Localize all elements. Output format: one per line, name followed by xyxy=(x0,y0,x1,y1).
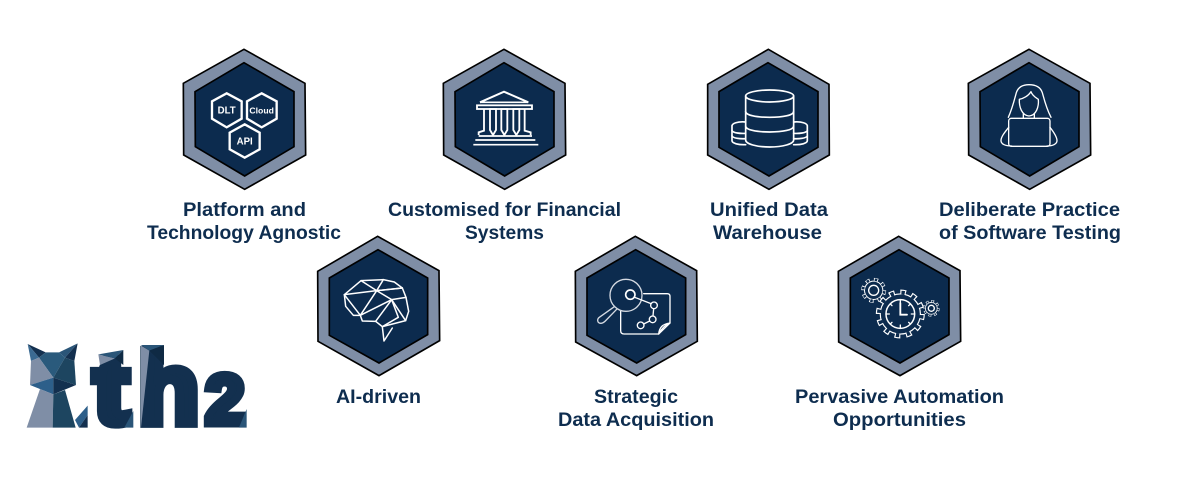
label: Unified Data Warehouse: Unified Data xyxy=(710,200,828,221)
label: Customised for Financial Systems: Customised for Financial xyxy=(388,200,621,221)
small gear top left xyxy=(863,279,885,301)
hexagon badge with DLT, Cloud and API icon xyxy=(183,49,306,189)
panel: AI-driven xyxy=(318,236,440,408)
logo: th2 with geometric cat xyxy=(27,333,247,445)
logo wordmark xyxy=(94,333,247,445)
logo wordmark: t xyxy=(94,335,129,444)
label: Deliberate Practice of Software Testing: Deliberate Practice xyxy=(939,200,1120,221)
label: Unified Data Warehouse: Warehouse xyxy=(713,223,822,244)
hexagon badge with database icon xyxy=(708,49,829,189)
label: Platform and Technology Agnostic: Platform and xyxy=(183,200,306,221)
label: Platform and Technology Agnostic: Technology Agnostic xyxy=(147,223,341,244)
hexagon badge with magnifier and data document icon xyxy=(575,236,697,376)
panel: Platform and Technology Agnostic xyxy=(147,49,341,244)
logo cat xyxy=(27,343,88,428)
panel: Deliberate Practice of Software Testing xyxy=(939,49,1121,244)
hexagon badge with DLT, Cloud and API icon: DLT xyxy=(218,105,236,116)
label: AI-driven: AI-driven xyxy=(336,387,421,408)
logo wordmark: 2 xyxy=(205,361,244,439)
label: Deliberate Practice of Software Testing: of Software Testing xyxy=(939,223,1121,244)
large gear with clock xyxy=(878,292,923,336)
logo wordmark: h xyxy=(138,333,199,445)
hexagon badge with polygonal brain icon xyxy=(318,236,440,376)
label: Strategic Data Acquisition: Strategic xyxy=(594,387,678,408)
panel: Customised for Financial Systems xyxy=(388,49,621,244)
label: Pervasive Automation Opportunities: Pervasive Automation xyxy=(795,387,1004,408)
panel: Unified Data Warehouse xyxy=(708,49,829,244)
panel: Pervasive Automation Opportunities xyxy=(795,236,1004,431)
hexagon badge with gears and clock icon xyxy=(838,236,961,376)
label: Customised for Financial Systems: Systems xyxy=(465,223,544,244)
hexagon badge with person at laptop icon xyxy=(968,49,1091,189)
label: Strategic Data Acquisition: Data Acquisition xyxy=(558,410,714,431)
panel: Strategic Data Acquisition xyxy=(558,236,714,431)
label: Pervasive Automation Opportunities: Opportunities xyxy=(833,410,966,431)
hexagon badge with DLT, Cloud and API icon: API xyxy=(237,136,253,147)
small gear right xyxy=(924,301,939,316)
hexagon badge with bank icon xyxy=(443,49,566,189)
hexagon badge with DLT, Cloud and API icon: Cloud xyxy=(249,105,274,115)
